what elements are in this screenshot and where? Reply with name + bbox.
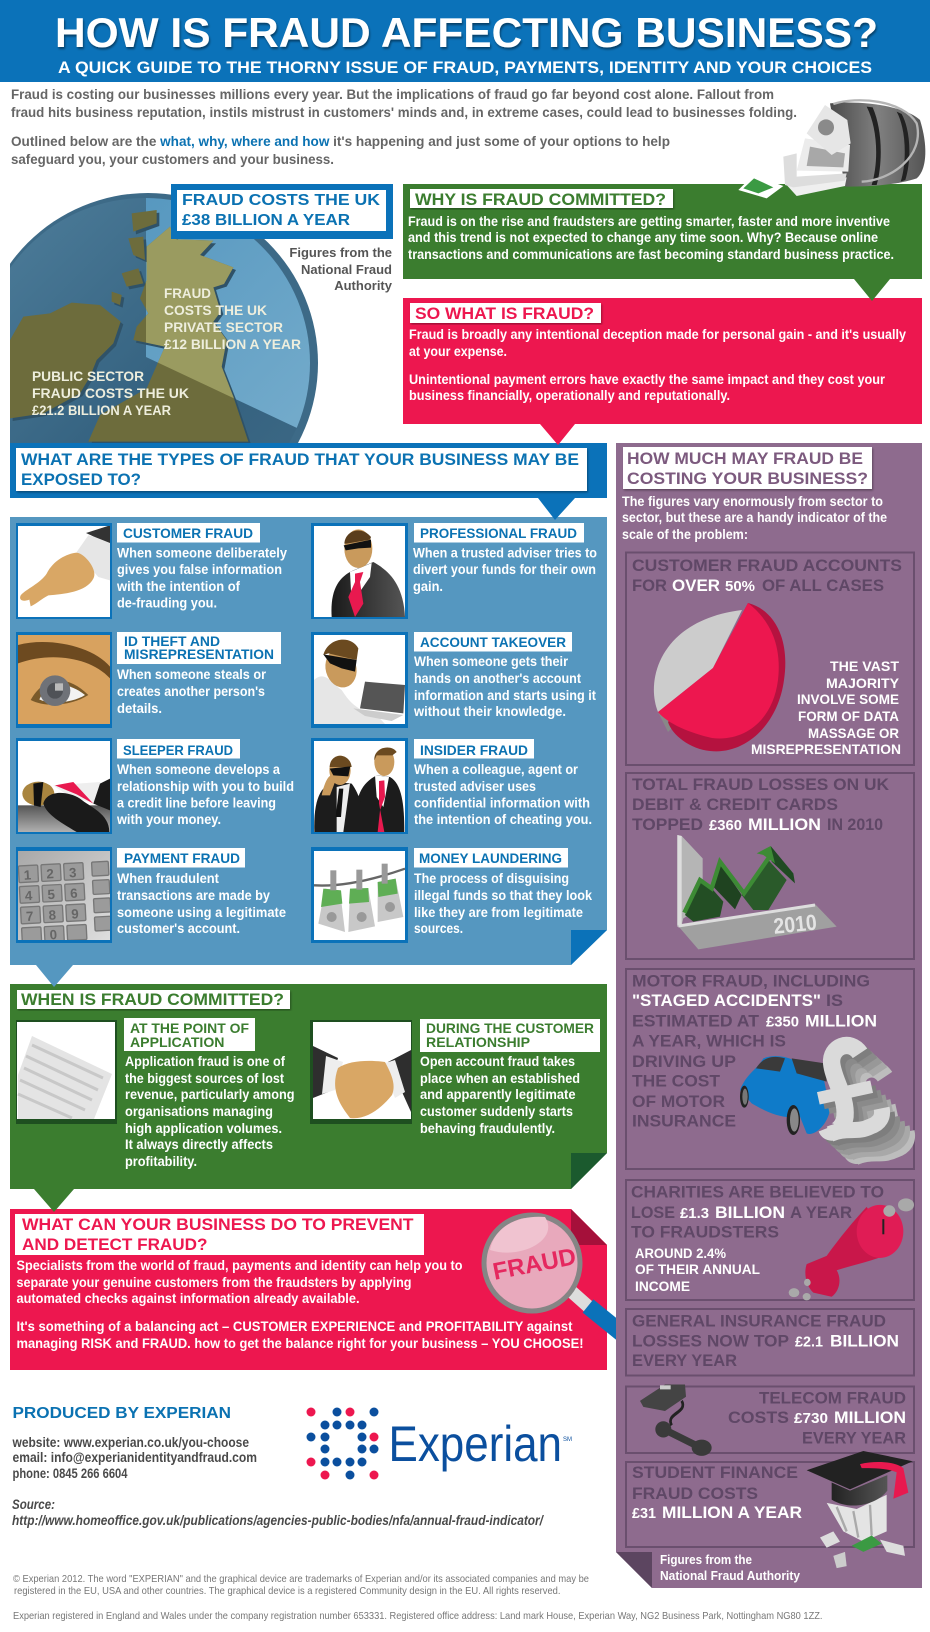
panel: why is fraud committed — [403, 184, 922, 301]
text: account takeover: hands on another's account — [414, 671, 581, 686]
application text: the biggest sources of lost — [125, 1071, 284, 1086]
stat: student finance: STUDENT FINANCE — [632, 1464, 798, 1482]
contact details — [12, 1435, 257, 1481]
text: definition of fraud: business financially, operationally and reputationally. — [409, 388, 730, 403]
text: customer fraud: with the intention of — [116, 579, 240, 594]
stat: motor fraud: MOTOR FRAUD, INCLUDING — [632, 972, 870, 990]
copyright footer: © Experian 2012. The word "EXPERIAN" and the graphical device are trademarks of Experian and/or its associated companies and may be — [13, 1573, 589, 1585]
text: customer fraud: gives you false information — [117, 562, 282, 577]
text: professional fraud: divert your funds for their own — [413, 562, 596, 577]
text: definition of fraud: Unintentional payment errors have exactly the same impact and they cost your — [409, 372, 886, 387]
text: money laundering: illegal funds so that they look — [414, 888, 592, 903]
intro text: Outlined below are the what, why, where and how it's happening and just some of your options to help — [11, 133, 670, 149]
application text — [125, 1054, 294, 1169]
relationship label: DURING THE CUSTOMER — [426, 1020, 594, 1036]
text: sleeper fraud — [116, 762, 294, 827]
Experian logo: Experian — [388, 1416, 562, 1472]
prevention text: managing RISK and FRAUD. how to get the balance right for your business – YOU CHOOSE! — [16, 1336, 584, 1351]
text: the vast majority: MISREPRESENTATION — [751, 741, 901, 757]
stat: customer fraud over 50%: FOR — [632, 577, 667, 595]
image: keypad: 0 — [49, 927, 57, 942]
private sector figure: COSTS THE UK — [164, 303, 267, 318]
label: sleeper fraud: SLEEPER FRAUD — [123, 742, 233, 758]
text: ID theft: details. — [117, 701, 162, 716]
public sector figure: FRAUD COSTS THE UK — [32, 386, 189, 401]
text: account takeover: without their knowledge. — [413, 704, 566, 719]
public sector figure: £21.2 BILLION A YEAR — [32, 403, 171, 418]
stat: motor fraud: A YEAR, WHICH IS — [632, 1032, 786, 1050]
label: ID theft: MISREPRESENTATION — [124, 646, 274, 662]
contact details: email: info@experianidentityandfraud.com — [12, 1450, 257, 1465]
image: two men in suits — [311, 738, 408, 834]
stat: student finance: £31 — [632, 1505, 656, 1522]
application text: organisations managing — [125, 1104, 273, 1119]
text: payment fraud: customer's account. — [117, 921, 240, 936]
image: keypad: 4 — [24, 888, 33, 903]
text: the vast majority: MAJORITY — [826, 675, 900, 691]
heading: costing your business: HOW MUCH MAY FRAUD BE — [627, 449, 863, 468]
text: definition of fraud — [409, 327, 906, 403]
title: HOW IS FRAUD AFFECTING BUSINESS? — [55, 9, 878, 56]
icon: car and pound sign — [740, 1046, 907, 1157]
stat: card losses: MILLION — [748, 816, 821, 834]
copyright footer: Experian registered in England and Wales under the company registration number 653331. Registered office address: Land mark House, Experian Way, NG2 Business Park, Nottingham NG80 1ZZ. — [13, 1610, 822, 1622]
stat: charities: CHARITIES ARE BELIEVED TO — [631, 1184, 884, 1202]
source note: figures: Figures from the — [660, 1552, 752, 1567]
text: insider fraud — [414, 762, 592, 827]
pie chart — [654, 603, 785, 751]
text: money laundering — [414, 871, 592, 936]
stat: telecom: EVERY YEAR — [802, 1430, 906, 1448]
text: definition of fraud: at your expense. — [409, 344, 507, 359]
icon: telephone — [640, 1384, 712, 1456]
panel: types of fraud — [10, 517, 607, 987]
stat: motor fraud: OF MOTOR — [632, 1093, 725, 1111]
stat: card losses: TOTAL FRAUD LOSSES ON UK — [632, 776, 889, 794]
text: insider fraud: the intention of cheating you. — [414, 812, 592, 827]
stat: motor fraud: INSURANCE — [632, 1112, 736, 1130]
stat: motor fraud: MILLION — [805, 1012, 877, 1030]
text: intro: The figures vary enormously from sector to — [622, 494, 883, 509]
stat: customer fraud over 50%: OF ALL CASES — [762, 577, 884, 595]
relationship label — [420, 1019, 600, 1052]
stat: telecom: MILLION — [834, 1409, 906, 1427]
copyright footer: registered in the EU, USA and other countries. The graphical device is a registered Community design in the EU. All rights reserved. — [14, 1585, 560, 1597]
image: handshake — [310, 1020, 412, 1124]
text: the vast majority: FORM OF DATA — [798, 708, 899, 724]
image: keypad: 7 — [26, 909, 34, 924]
header banner — [0, 0, 930, 82]
label: ID theft: ID THEFT AND — [124, 633, 220, 649]
heading: types of fraud — [10, 443, 607, 520]
label: payment fraud: PAYMENT FRAUD — [124, 850, 240, 866]
stat: telecom — [626, 1384, 914, 1456]
text: payment fraud: When fraudulent — [117, 871, 219, 886]
stat: charities — [626, 1180, 914, 1300]
heading: prevent and detect: WHAT CAN YOUR BUSINESS DO TO PREVENT — [22, 1215, 414, 1234]
heading: costing your business: COSTING YOUR BUSINESS? — [627, 469, 868, 488]
text: professional fraud — [413, 546, 597, 594]
source: http://www.homeoffice.gov.uk/publications/agencies-public-bodies/nfa/annual-fraud-indicator/ — [12, 1513, 544, 1528]
text: intro: scale of the problem: — [622, 527, 748, 542]
text: payment fraud: someone using a legitimate — [117, 905, 286, 920]
intro text: Fraud is costing our businesses millions every year. But the implications of fraud go far beyond cost alone. Fallout from — [11, 86, 774, 102]
icon: graduation cap with money — [807, 1451, 913, 1568]
prevention text: automated checks against information already available. — [16, 1291, 360, 1306]
label: insider fraud: INSIDER FRAUD — [420, 742, 528, 758]
globe map of the UK — [10, 193, 318, 443]
stat: motor fraud: ESTIMATED AT — [632, 1012, 759, 1030]
stat: motor fraud: IS — [826, 992, 843, 1010]
prevention text: It's something of a balancing act – CUSTOMER EXPERIENCE and PROFITABILITY against — [16, 1319, 573, 1334]
subtitle: A QUICK GUIDE TO THE THORNY ISSUE OF FRAUD, PAYMENTS, IDENTITY AND YOUR CHOICES — [58, 58, 872, 77]
private sector figure — [164, 286, 301, 352]
text: the vast majority — [751, 658, 901, 757]
image: crossed fingers hand — [16, 523, 112, 619]
text: account takeover — [413, 654, 596, 719]
stat: general insurance: GENERAL INSURANCE FRAUD — [632, 1312, 886, 1330]
panel: so what is fraud — [403, 298, 922, 445]
contact details: website: www.experian.co.uk/you-choose — [12, 1435, 249, 1450]
copyright footer — [13, 1573, 822, 1622]
callout: fraud costs the UK — [171, 184, 393, 239]
stat: student finance: FRAUD COSTS — [632, 1485, 758, 1503]
image: keypad: 5 — [47, 887, 56, 902]
text: ID theft — [117, 667, 267, 716]
icon: magnifying glass — [484, 1215, 625, 1336]
prevention text: Specialists from the world of fraud, payments and identity can help you to — [16, 1258, 462, 1273]
application label — [124, 1018, 255, 1051]
text: insider fraud: confidential information with — [414, 796, 590, 810]
heading: types of fraud: EXPOSED TO? — [21, 470, 141, 489]
label: customer fraud: CUSTOMER FRAUD — [123, 525, 253, 541]
relationship text: and apparently legitimate — [420, 1087, 576, 1102]
image: keypad: 1 — [23, 867, 32, 883]
intro text — [11, 86, 797, 167]
relationship label: RELATIONSHIP — [426, 1034, 530, 1050]
stat: general insurance: BILLION — [830, 1332, 899, 1350]
application text: It always directly affects — [125, 1137, 273, 1152]
text: professional fraud: When a trusted adviser tries to — [413, 546, 597, 560]
text: the vast majority: MASSAGE OR — [808, 725, 899, 741]
stat: customer fraud over 50%: OVER — [672, 577, 720, 595]
text: sleeper fraud: relationship with you to build — [117, 779, 294, 794]
stat: charities: £1.3 — [680, 1205, 709, 1222]
text: customer fraud — [116, 546, 287, 610]
image: keypad: 9 — [71, 906, 79, 922]
application text: high application volumes. — [125, 1121, 282, 1136]
application text: revenue, particularly among — [125, 1087, 294, 1102]
stat: motor fraud — [626, 969, 914, 1169]
panel: when is fraud committed — [10, 984, 607, 1212]
public sector figure — [32, 369, 189, 418]
source note: National Fraud Authority — [289, 245, 393, 293]
text: intro — [622, 494, 887, 542]
text: ID theft: creates another person's — [117, 684, 265, 699]
chart: rising arrow 2010 — [677, 835, 837, 949]
source note: National Fraud Authority: Figures from the — [289, 245, 392, 260]
image: keypad: 8 — [48, 907, 56, 923]
public sector figure: PUBLIC SECTOR — [32, 369, 144, 384]
stat: card losses: £360 — [709, 817, 742, 834]
relationship text: place when an established — [420, 1071, 580, 1086]
contact details: phone: 0845 266 6604 — [12, 1466, 128, 1481]
panel: what can your business do — [10, 1209, 625, 1370]
application text: Application fraud is one of — [125, 1054, 285, 1069]
application label: AT THE POINT OF — [130, 1020, 249, 1036]
stat: card losses: DEBIT & CREDIT CARDS — [632, 796, 838, 814]
intro text: safeguard you, your customers and your business. — [11, 151, 334, 167]
text: definition of fraud: Fraud is broadly any intentional deception made for personal gain - and it's usually — [409, 327, 906, 342]
stat: card losses: IN 2010 — [827, 816, 883, 834]
text: professional fraud: gain. — [413, 579, 443, 594]
heading: when: WHEN IS FRAUD COMMITTED? — [21, 991, 284, 1009]
text: account takeover: information and starts using it — [414, 688, 596, 703]
image: keypad: 6 — [70, 886, 78, 901]
image: masked man with laptop — [311, 632, 408, 728]
text: the vast majority: THE VAST — [830, 658, 899, 674]
text: insider fraud: trusted adviser uses — [414, 779, 536, 794]
stat: general insurance: £2.1 — [795, 1334, 823, 1350]
panel: how much may fraud be costing — [616, 443, 922, 1588]
stat: motor fraud: DRIVING UP — [632, 1053, 736, 1071]
stat: card losses: TOPPED — [632, 816, 703, 834]
text: money laundering: The process of disguising — [414, 871, 569, 886]
produced by heading: PRODUCED BY EXPERIAN — [12, 1405, 231, 1422]
stat: telecom: £730 — [794, 1410, 828, 1427]
stat: charities: TO FRAUDSTERS — [631, 1224, 779, 1242]
image: keypad — [16, 847, 112, 944]
stat: general insurance: LOSSES NOW TOP — [632, 1332, 789, 1350]
source: Source: — [12, 1497, 55, 1512]
image: keypad: 3 — [69, 865, 77, 880]
image: keypad: 2 — [46, 866, 54, 882]
stat: customer fraud over 50%: 50% — [725, 578, 755, 595]
text: why: and this trend is not expected to change any time soon. Why? Because online — [408, 230, 878, 245]
label: account takeover: ACCOUNT TAKEOVER — [420, 634, 566, 650]
text: payment fraud: transactions are made by — [117, 888, 270, 903]
text: customer fraud: When someone deliberately — [117, 546, 287, 560]
stat: student finance — [626, 1451, 914, 1568]
label: money laundering: MONEY LAUNDERING — [419, 850, 562, 866]
stat: motor fraud: £350 — [766, 1014, 799, 1030]
image: masked professional — [311, 523, 408, 619]
text: money laundering: like they are from legitimate — [414, 905, 583, 920]
text: payment fraud — [117, 871, 286, 936]
text: insider fraud: When a colleague, agent or — [414, 762, 579, 777]
stat: charities: LOSE — [631, 1204, 675, 1222]
private sector figure: £12 BILLION A YEAR — [164, 337, 301, 352]
application label: APPLICATION — [130, 1034, 224, 1050]
text: customer fraud: de-frauding you. — [117, 596, 217, 610]
heading: so what is fraud: SO WHAT IS FRAUD? — [415, 305, 594, 323]
stat: card losses — [626, 773, 914, 959]
Experian logo — [306, 1408, 572, 1480]
text: the vast majority: INVOLVE SOME — [797, 691, 899, 707]
text: sleeper fraud: with your money. — [116, 812, 221, 827]
text: sleeper fraud: When someone develops a — [117, 762, 280, 777]
stat: general insurance: EVERY YEAR — [632, 1352, 737, 1370]
icon: bucket spilling money — [738, 100, 925, 198]
stat: customer fraud over 50% — [626, 552, 914, 765]
text: account takeover: When someone gets their — [414, 654, 569, 669]
text: around 2.4%: OF THEIR ANNUAL — [635, 1262, 760, 1277]
stat: general insurance — [626, 1309, 914, 1376]
callout: fraud costs the UK: FRAUD COSTS THE UK — [182, 192, 380, 209]
stat: customer fraud over 50%: CUSTOMER FRAUD ACCOUNTS — [632, 557, 902, 575]
heading: why: WHY IS FRAUD COMMITTED? — [415, 191, 666, 209]
callout: fraud costs the UK: £38 BILLION A YEAR — [182, 212, 350, 229]
text: why: transactions and communications are fast becoming standard business practice. — [408, 247, 894, 262]
intro text: fraud hits business reputation, instils mistrust in customers' minds and, in extreme cases, could lead to businesses folding. — [11, 104, 797, 120]
image: sleeper slumped on desk — [16, 738, 112, 834]
Experian logo: SM — [563, 1437, 572, 1443]
text: sleeper fraud: a credit line before leaving — [117, 796, 276, 810]
application text: profitability. — [125, 1154, 197, 1169]
image: banknotes on a line — [311, 847, 408, 943]
icon: magnifying glass: FRAUD — [491, 1243, 578, 1286]
source note: figures — [660, 1552, 801, 1583]
heading: types of fraud: WHAT ARE THE TYPES OF FRAUD THAT YOUR BUSINESS MAY BE — [21, 450, 579, 469]
text: around 2.4% — [635, 1246, 760, 1294]
private sector figure: FRAUD — [164, 286, 211, 301]
label: professional fraud: PROFESSIONAL FRAUD — [420, 525, 577, 541]
image: application paper — [16, 1020, 117, 1124]
source note: figures: National Fraud Authority — [660, 1568, 801, 1583]
relationship text: Open account fraud takes — [420, 1054, 575, 1069]
source note: National Fraud Authority: Authority — [334, 278, 393, 293]
text: intro: sector, but these are a handy indicator of the — [622, 510, 887, 525]
image: eye — [16, 632, 112, 728]
relationship text — [420, 1054, 580, 1136]
prevention text — [16, 1258, 584, 1351]
stat: motor fraud: "STAGED ACCIDENTS" — [632, 992, 821, 1010]
private sector figure: PRIVATE SECTOR — [164, 320, 283, 335]
stat: motor fraud: THE COST — [632, 1072, 720, 1090]
heading: prevent and detect — [15, 1214, 424, 1255]
text: why — [408, 214, 894, 262]
chart: rising arrow 2010: 2010 — [772, 909, 818, 939]
text: around 2.4%: INCOME — [635, 1279, 690, 1294]
stat: telecom: TELECOM FRAUD — [759, 1390, 906, 1408]
text: money laundering: sources. — [414, 921, 463, 936]
text: around 2.4%: AROUND 2.4% — [635, 1246, 726, 1261]
heading: prevent and detect: AND DETECT FRAUD? — [22, 1235, 208, 1254]
source — [12, 1497, 544, 1528]
stat: charities: A YEAR — [790, 1204, 852, 1222]
stat: telecom: COSTS — [728, 1409, 789, 1427]
stat: student finance: MILLION A YEAR — [662, 1504, 802, 1522]
relationship text: behaving fraudulently. — [420, 1121, 555, 1136]
relationship text: customer suddenly starts — [420, 1104, 573, 1119]
icon: red piggy bank tipped — [789, 1198, 914, 1300]
label: ID theft — [117, 632, 281, 664]
stat: charities: BILLION — [715, 1204, 785, 1222]
prevention text: separate your genuine customers from the fraudsters by applying — [16, 1275, 412, 1290]
text: ID theft: When someone steals or — [117, 667, 267, 682]
source note: National Fraud Authority: National Fraud — [301, 262, 392, 277]
text: why: Fraud is on the rise and fraudsters are getting smarter, faster and more inventive — [408, 214, 890, 229]
heading: costing your business — [623, 447, 872, 489]
